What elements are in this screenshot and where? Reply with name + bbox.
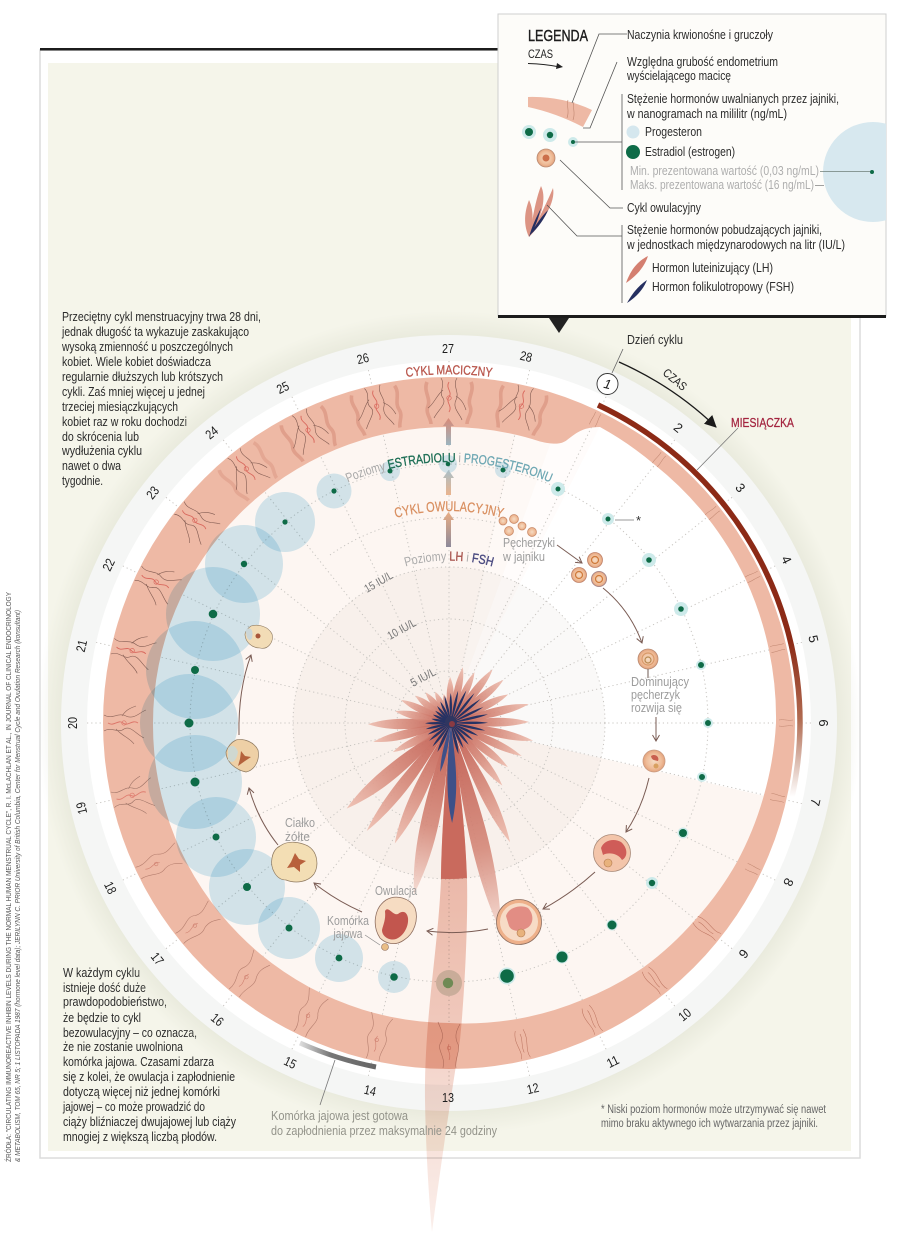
intro text block: wysoką zmienność u poszczególnych <box>61 340 233 354</box>
dotted grid <box>87 361 811 1085</box>
label: follicles: w jajniku <box>502 549 545 564</box>
note: egg ready: Komórka jajowa jest gotowa <box>271 1108 409 1123</box>
label: corpus luteum: Ciałko <box>285 815 315 830</box>
day numbers: 24 <box>202 423 221 442</box>
anovulatory cycle text block: że będzie to cykl <box>63 1011 141 1025</box>
day numbers: 26 <box>355 350 370 367</box>
day numbers: 21 <box>73 638 90 653</box>
legend: size scale <box>630 122 900 222</box>
three growing follicles <box>572 552 606 586</box>
legend leader lines <box>547 34 627 303</box>
LH hormone petals <box>342 666 534 934</box>
gray egg-ready arc <box>300 1043 376 1067</box>
day numbers: 2 <box>671 420 686 436</box>
label: corpus luteum <box>285 815 315 844</box>
time arrow: CZAS <box>660 366 690 394</box>
day numbers: 28 <box>519 348 534 365</box>
intro text block: nawet o dwa <box>62 459 121 473</box>
day numbers: 18 <box>101 879 120 896</box>
menstruation arc <box>598 405 800 797</box>
dominant follicle <box>638 649 658 678</box>
source note: & METABOLISM, TOM 65, NR 5; 1 LISTOPADA 1987 (hormone level data); JERILYNN C. PRIOR University of British Columbia, Center for Menstrual Cycle and Ovulation Research (konsultant) <box>13 610 22 1162</box>
label: dominant follicle: rozwija się <box>631 700 682 715</box>
day one marker: 1 <box>602 376 613 392</box>
day numbers: 8 <box>780 876 797 889</box>
IU/L scale labels: 15 IU/L <box>362 569 396 596</box>
anovulatory cycle text block: ciąży bliźniaczej dwujajowej lub ciąży <box>63 1115 237 1129</box>
anovulatory cycle text block: W każdym cyklu <box>63 966 140 980</box>
intro text block: do skrócenia lub <box>62 430 139 444</box>
follicle stage large <box>594 834 630 872</box>
label: menstruation <box>697 415 794 470</box>
day numbers: 15 <box>282 1053 299 1072</box>
intro text block <box>61 310 261 488</box>
legend: endometrium thickness: Względna grubość endometrium <box>627 55 778 69</box>
title: ovulatory cycle: CYKL OWULACYJNY <box>394 501 504 518</box>
label: menstruation: MIESIĄCZKA <box>731 415 794 430</box>
asterisk callout <box>615 513 641 528</box>
intro text block: jednak długość ta wykazuje zaskakująco <box>61 325 249 339</box>
corpus luteum small <box>245 625 272 648</box>
label: egg cell <box>327 913 380 945</box>
legend time arrow: CZAS <box>528 47 553 61</box>
label: dominant follicle: Dominujący <box>631 674 689 689</box>
intro text block: wydłużenia cyklu <box>61 444 142 458</box>
legend: LH <box>626 256 773 283</box>
top rule <box>40 48 860 50</box>
cream panel <box>48 63 851 1151</box>
label: cycle day: Dzień cyklu <box>627 333 683 347</box>
IU/L scale labels <box>362 569 439 690</box>
anovulatory cycle text block: mnogiej z większą liczbą płodów. <box>63 1130 217 1144</box>
label: ovulation: Owulacja <box>375 883 418 898</box>
day numbers: 5 <box>805 634 822 644</box>
source note <box>4 592 22 1162</box>
centre arrows <box>443 418 454 547</box>
label: follicles <box>502 535 555 564</box>
ovulatory cycle arrows <box>239 545 656 933</box>
anovulatory cycle text block: istnieje dość duże <box>63 981 146 995</box>
legend: LH: Hormon luteinizujący (LH) <box>652 261 773 275</box>
title: hormone levels: Poziomy ESTRADIOLU i PROGESTERONU <box>345 452 553 482</box>
legend: stimulating hormones <box>626 223 845 252</box>
day one marker <box>597 349 623 394</box>
day numbers: 20 <box>65 717 80 729</box>
legend: ovulatory cycle: Cykl owulacyjny <box>627 201 702 215</box>
day numbers: 14 <box>363 1082 378 1099</box>
anovulatory cycle text block: jajowej – co może prowadzić do <box>62 1100 205 1114</box>
footnote <box>601 1104 827 1130</box>
legend: endometrium thickness: wyścielającego macicę <box>626 69 731 83</box>
legend: estradiol: Estradiol (estrogen) <box>645 145 735 159</box>
IU/L scale labels: 10 IU/L <box>386 617 419 643</box>
note: egg ready <box>271 1060 497 1138</box>
legend: vessels and glands: Naczynia krwionośne i gruczoły <box>627 28 774 42</box>
day 13 LH spike inside disc <box>441 723 467 880</box>
progesterone bubbles <box>140 455 713 996</box>
day numbers: 11 <box>604 1052 621 1071</box>
day numbers: 7 <box>807 797 824 807</box>
title: LH and FSH levels: Poziomy LH i FSH <box>404 551 494 566</box>
day numbers: 13 <box>442 1090 454 1105</box>
day 13 LH spike beyond disc <box>425 723 467 1232</box>
legend: ovarian hormones <box>626 92 839 121</box>
estradiol dots <box>184 462 711 988</box>
day numbers: 16 <box>208 1010 227 1029</box>
intro text block: regularnie dłuższych lub krótszych <box>62 370 223 384</box>
FSH hormone petals <box>425 690 488 823</box>
note: egg ready: do zapłodnienia przez maksymalnie 24 godziny <box>271 1123 497 1138</box>
day numbers: 17 <box>148 949 167 968</box>
legend: FSH: Hormon folikulotropowy (FSH) <box>652 280 794 294</box>
intro text block: cykli. Zaś mniej więcej u jednej <box>62 385 205 399</box>
legend panel <box>498 14 900 333</box>
legend: ovarian hormones: w nanogramach na mililitr (ng/mL) <box>626 107 787 121</box>
day numbers: 19 <box>73 801 90 816</box>
follicle stage <box>643 750 665 772</box>
footnote: mimo braku aktywnego ich wytwarzania przez jajniki. <box>601 1118 818 1130</box>
day numbers: 12 <box>525 1080 540 1097</box>
legend: FSH <box>627 280 794 303</box>
day numbers: 27 <box>442 341 454 356</box>
label: dominant follicle <box>631 674 689 715</box>
anovulatory cycle text block: bezowulacyjny – co oznacza, <box>63 1026 197 1040</box>
day numbers: 9 <box>736 946 752 961</box>
title: uterine cycle: CYKL MACICZNY <box>406 365 493 377</box>
anovulatory cycle text block: komórka jajowa. Czasami zdarza <box>63 1055 214 1069</box>
day numbers: 4 <box>778 553 795 566</box>
footnote: * Niski poziom hormonów może utrzymywać się nawet <box>601 1104 827 1116</box>
circular chart background rings <box>37 311 861 1135</box>
anovulatory cycle text block: że nie zostanie uwolniona <box>63 1040 183 1054</box>
intro text block: kobiet. Wiele kobiet doświadcza <box>62 355 211 369</box>
endometrium band <box>103 377 795 1069</box>
day numbers: 22 <box>99 556 118 573</box>
vessels and glands in endometrium <box>104 378 793 1068</box>
intro text block: trzeciej miesiączkujących <box>62 400 178 414</box>
intro text block: Przeciętny cykl menstruacyjny trwa 28 dni, <box>62 310 261 324</box>
legend title: LEGENDA <box>528 28 589 45</box>
corpus luteum medium <box>226 739 258 772</box>
ovulation illustration <box>375 897 416 950</box>
legend: ovarian hormones: Stężenie hormonów uwalnianych przez jajniki, <box>627 92 839 106</box>
legend: stimulating hormones: Stężenie hormonów pobudzających jajniki, <box>627 223 822 237</box>
legend: size scale: Min. prezentowana wartość (0,03 ng/mL) <box>630 164 819 178</box>
source note: ŹRÓDŁA: "CIRCULATING IMMUNOREACTIVE INHIBIN LEVELS DURING THE NORMAL HUMAN MENSTRUAL CYCLE", R. I. McLACHLAN ET AL., IN JOURNAL OF CLINICAL ENDOCRINOLOGY <box>4 592 13 1162</box>
legend: size scale: Maks. prezentowana wartość (16 ng/mL) <box>630 178 814 192</box>
asterisk callout: * <box>636 513 641 528</box>
time arrow <box>619 362 716 427</box>
label: egg cell: jajowa <box>333 926 363 941</box>
day numbers: 10 <box>675 1005 694 1024</box>
label: dominant follicle: pęcherzyk <box>631 687 680 702</box>
label: follicles: Pęcherzyki <box>503 535 555 550</box>
day numbers: 3 <box>732 480 748 495</box>
legend: progesterone <box>626 125 702 139</box>
day numbers: 6 <box>816 719 831 727</box>
legend time arrow <box>528 47 563 69</box>
day numbers: 23 <box>143 483 162 502</box>
IU/L scale labels: 5 IU/L <box>409 666 439 690</box>
follicle mature <box>496 900 542 944</box>
anovulatory cycle text block: prawdopodobieństwo, <box>63 995 167 1009</box>
ovarian follicles group <box>499 514 536 536</box>
legend mini diagram <box>522 97 592 237</box>
label: egg cell: Komórka <box>327 913 370 928</box>
corpus luteum large <box>272 842 317 882</box>
anovulatory cycle text block: dotyczą więcej niż jednej komórki <box>63 1085 220 1099</box>
legend: progesterone: Progesteron <box>645 125 702 139</box>
intro text block: tygodnie. <box>62 474 103 488</box>
intro text block: kobiet raz w roku dochodzi <box>62 415 187 429</box>
legend: endometrium thickness <box>626 55 778 83</box>
anovulatory cycle text block <box>62 966 237 1144</box>
day numbers <box>65 341 831 1105</box>
anovulatory cycle text block: się z kolei, że owulacja i zapłodnienie <box>63 1070 235 1084</box>
label: corpus luteum: żółte <box>285 829 310 844</box>
day numbers: 25 <box>274 378 291 397</box>
legend: stimulating hormones: w jednostkach międzynarodowych na litr (IU/L) <box>626 238 845 252</box>
